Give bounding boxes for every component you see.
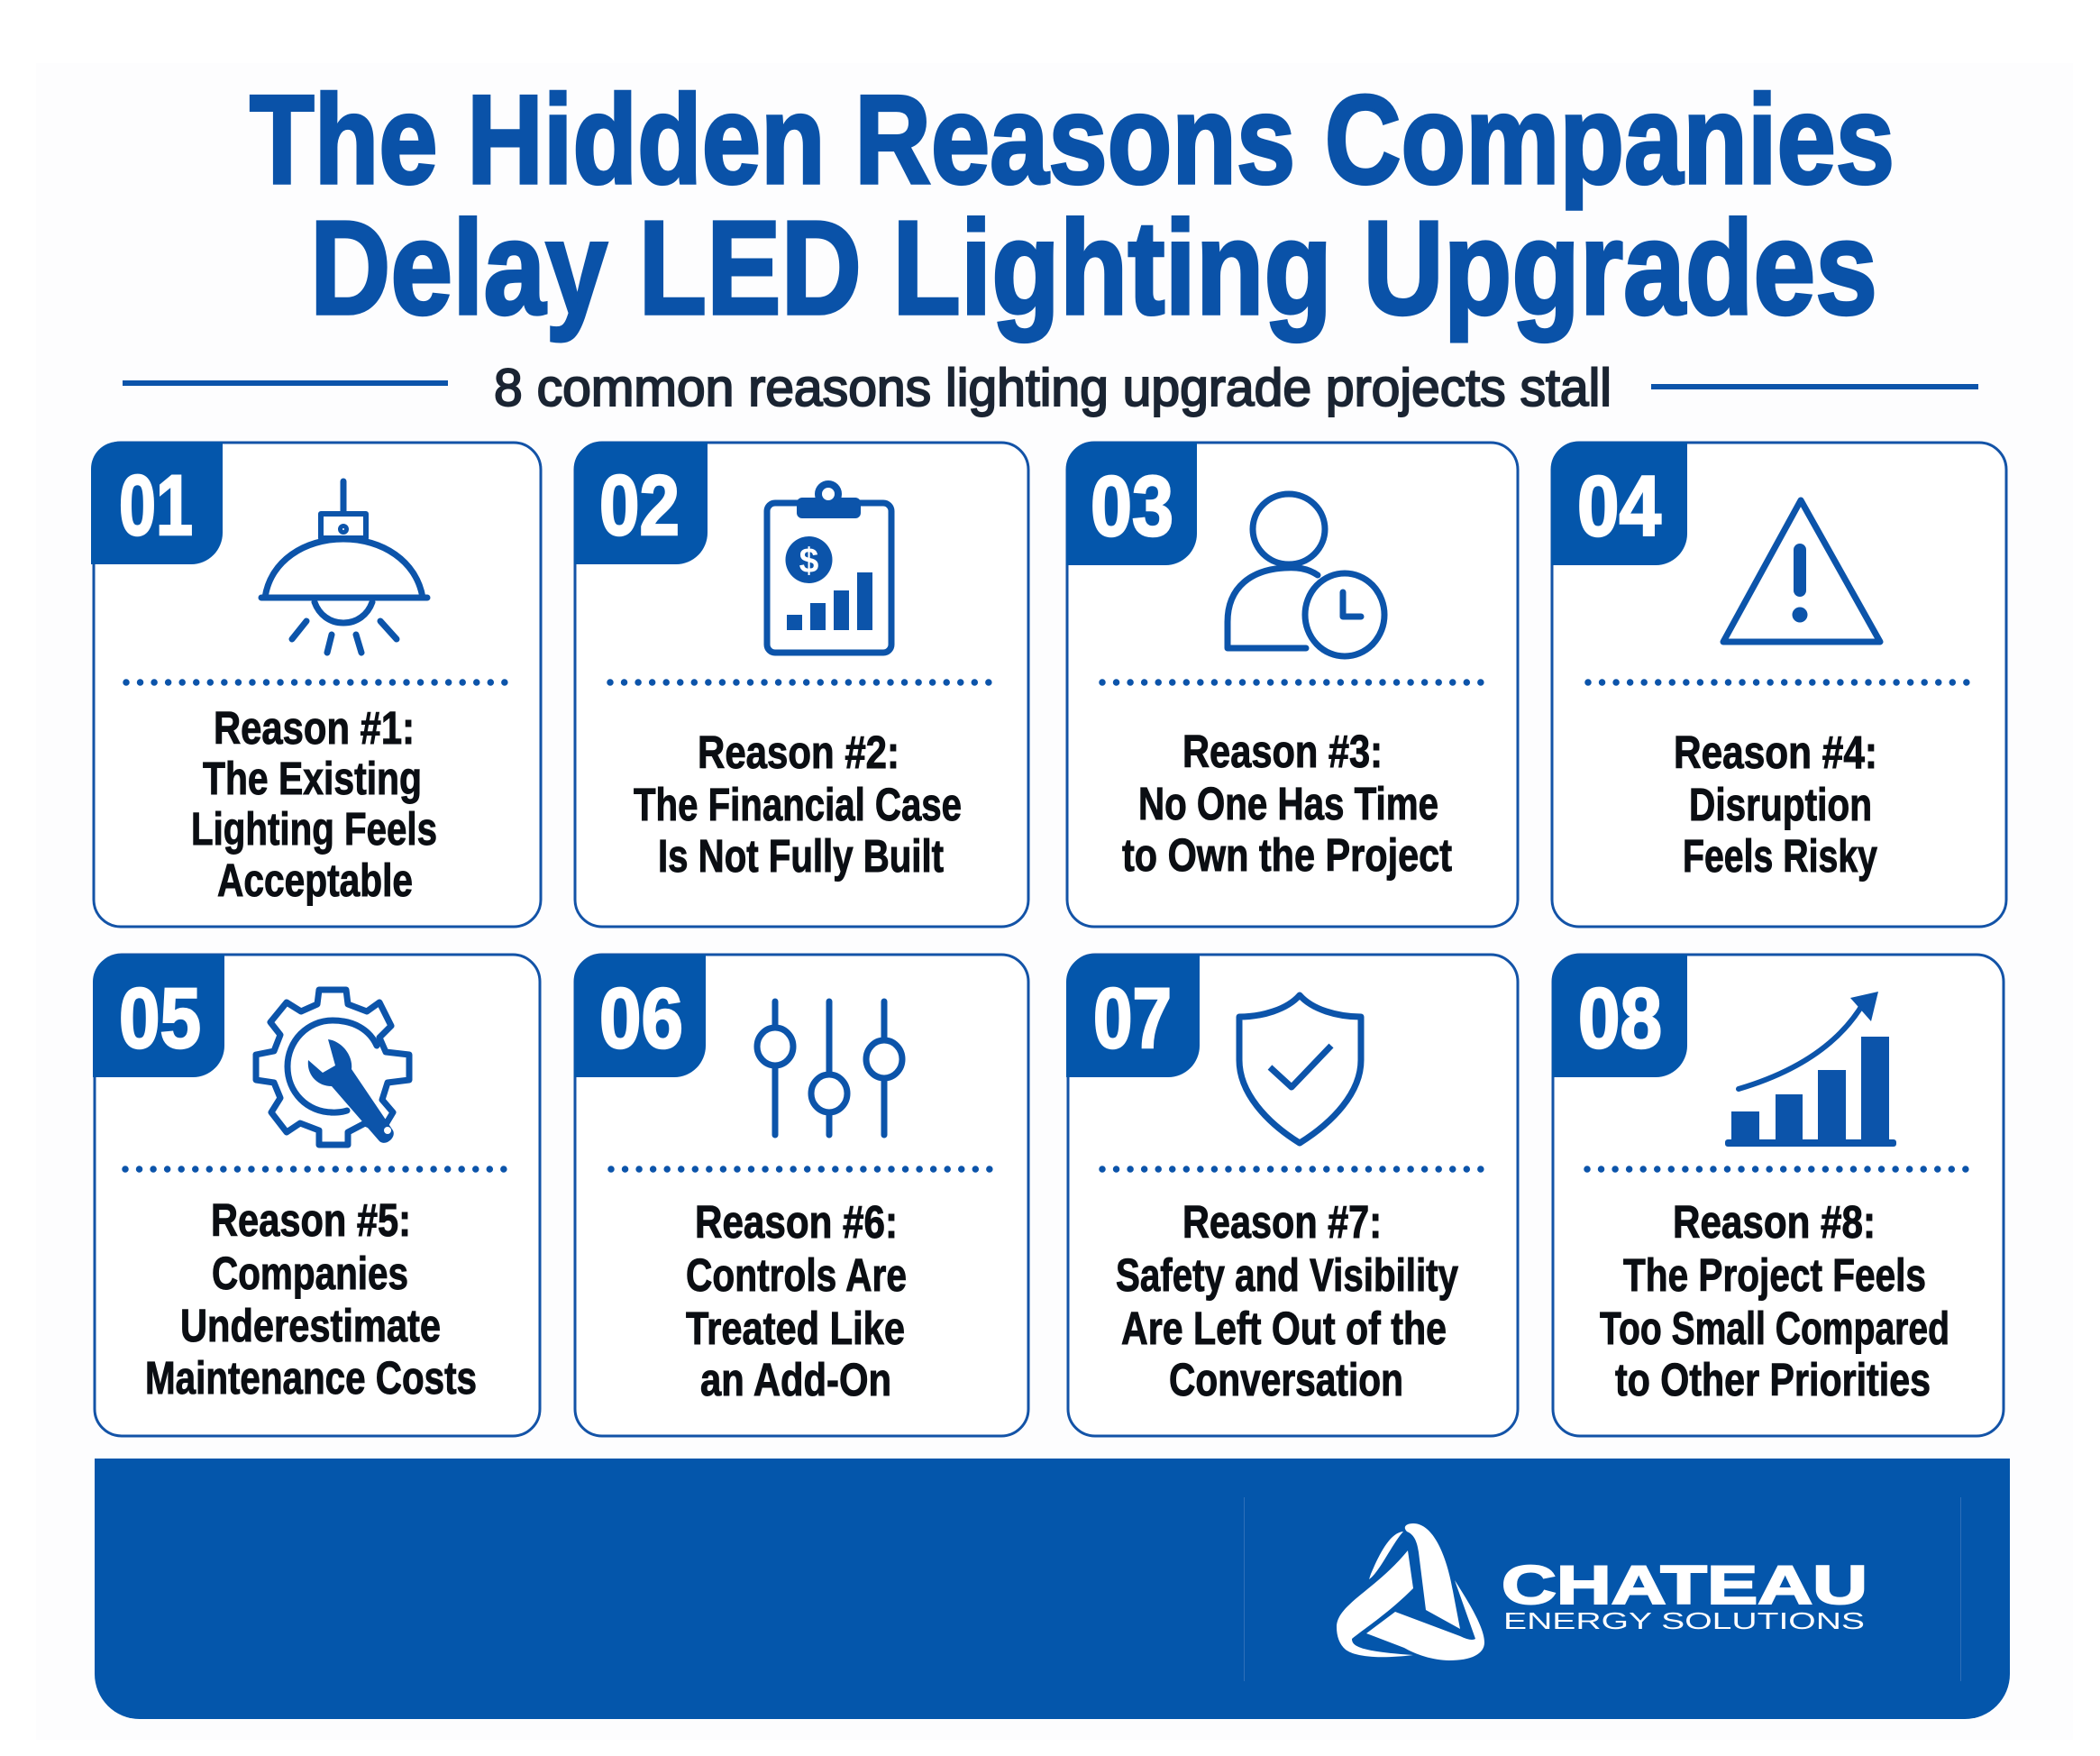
wordmark: CHATEAU: [1502, 1555, 1867, 1615]
panel: card 7: [1066, 955, 1518, 1436]
number badge 06: [574, 955, 706, 1077]
icon: sliders: [757, 1001, 902, 1135]
text: reason 2: [634, 727, 962, 882]
text: reason 3: No One Has Time: [1138, 778, 1438, 829]
number badge 02: [574, 442, 708, 564]
icon: growth chart with arrow: [1725, 992, 1896, 1147]
text: reason 7: Conversation: [1169, 1354, 1403, 1405]
logo mark: [1337, 1523, 1484, 1660]
text: reason 8: The Project Feels: [1623, 1249, 1926, 1301]
text: reason 5: Reason #5:: [211, 1194, 411, 1246]
number badge 02: 02: [599, 458, 680, 553]
number badge 05: [93, 955, 224, 1077]
text: reason 2: Reason #2:: [698, 727, 899, 778]
icon: person with clock: [1228, 494, 1384, 656]
text: reason 3: Reason #3:: [1182, 726, 1383, 777]
text: reason 6: Reason #6:: [695, 1196, 898, 1248]
icon: shield with check: [1239, 995, 1361, 1143]
text: reason 2: The Financial Case: [634, 779, 962, 830]
number badge 07: 07: [1093, 971, 1172, 1066]
text: reason 5: Underestimate: [180, 1300, 441, 1351]
text: reason 1: Reason #1:: [214, 702, 415, 754]
panel: card 4: [1551, 442, 2006, 927]
number badge 01: [91, 442, 223, 564]
icon: pendant lamp: [261, 481, 427, 653]
text: reason 2: Is Not Fully Built: [658, 830, 944, 882]
number badge 03: [1066, 442, 1197, 565]
number badge 07: [1066, 955, 1200, 1077]
number badge 04: [1551, 442, 1687, 565]
number badge 03: 03: [1091, 459, 1173, 554]
text: reason 1: Acceptable: [217, 855, 413, 906]
number badge 04: 04: [1577, 459, 1661, 554]
icon: warning triangle: [1723, 500, 1880, 642]
icon: clipboard with dollar and bars: $: [799, 542, 819, 581]
icon: clipboard with dollar and bars: [767, 484, 891, 653]
text: reason 4: Disruption: [1689, 779, 1872, 830]
text: reason 5: Maintenance Costs: [145, 1352, 477, 1404]
text: reason 4: [1674, 727, 1877, 882]
logo: Chateau Energy Solutions: [1337, 1523, 1867, 1660]
text: reason 7: [1116, 1196, 1459, 1405]
number badge 08: [1552, 955, 1687, 1077]
number badge 01: 01: [119, 458, 193, 553]
panel: card 2: [574, 442, 1028, 927]
text: reason 1: [191, 702, 437, 906]
text: reason 6: Treated Like: [686, 1303, 905, 1354]
text: reason 8: to Other Priorities: [1615, 1354, 1931, 1405]
number badge 08: 08: [1578, 971, 1662, 1066]
icon: gear with wrench: [256, 990, 409, 1145]
text: reason 4: Feels Risky: [1683, 830, 1877, 882]
panel: card 8: [1552, 955, 2004, 1436]
text: reason 8: [1600, 1196, 1949, 1405]
text: reason 8: Reason #8:: [1673, 1196, 1876, 1248]
footer band: [95, 1459, 2010, 1719]
text: reason 7: Reason #7:: [1182, 1196, 1382, 1248]
wordmark: ENERGY SOLUTIONS: [1503, 1607, 1865, 1634]
text: reason 6: an Add-On: [700, 1354, 891, 1405]
title: [250, 69, 1895, 343]
subtitle with rules: [123, 359, 1978, 417]
text: reason 6: Controls Are: [686, 1249, 907, 1301]
text: reason 6: [686, 1196, 907, 1405]
text: reason 7: Safety and Visibility: [1116, 1249, 1459, 1301]
text: reason 4: Reason #4:: [1674, 727, 1877, 778]
panel: card 6: [574, 955, 1028, 1436]
subtitle with rules: 8 common reasons lighting upgrade projects stall: [494, 359, 1612, 417]
text: reason 3: to Own the Project: [1122, 829, 1452, 881]
panel: card 3: [1066, 442, 1518, 927]
number badge 06: 06: [599, 971, 683, 1066]
text: reason 1: The Existing: [203, 753, 422, 804]
wordmark: [1502, 1555, 1867, 1634]
text: reason 3: [1122, 726, 1452, 881]
panel: card 5: [93, 955, 540, 1436]
text: reason 1: Lighting Feels: [191, 803, 437, 855]
text: reason 5: [145, 1194, 477, 1404]
number badge 05: 05: [119, 971, 201, 1066]
text: reason 5: Companies: [212, 1248, 408, 1299]
text: reason 8: Too Small Compared: [1600, 1303, 1949, 1354]
text: reason 7: Are Left Out of the: [1121, 1303, 1447, 1354]
panel: card 1: [91, 442, 541, 927]
